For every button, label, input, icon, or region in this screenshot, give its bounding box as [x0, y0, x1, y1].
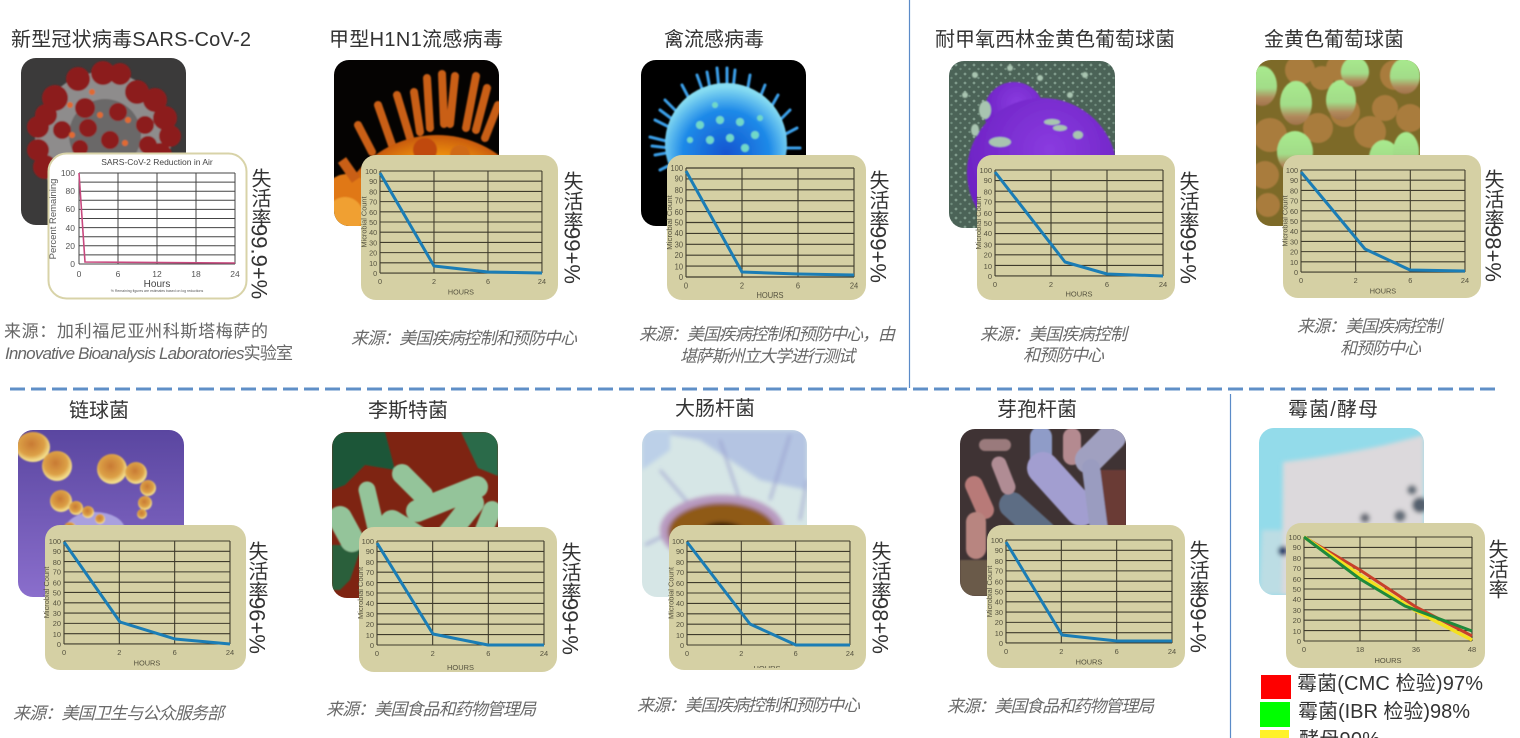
- chart: 100: [670, 164, 683, 173]
- chart: 50: [676, 589, 684, 598]
- chart: Microbial Count: [360, 196, 368, 248]
- chart: 100: [672, 537, 684, 546]
- heading: 大肠杆菌: [675, 397, 755, 420]
- image: E. coli: [642, 430, 807, 597]
- chart: 40: [675, 229, 683, 238]
- chart: 50: [1293, 585, 1301, 594]
- panel: Staphylococcus aureus: [1247, 28, 1506, 358]
- chart: 0: [1294, 268, 1298, 277]
- chart: 10: [675, 262, 683, 272]
- chart: SARS-CoV-2 reduction in air: 60: [66, 204, 75, 214]
- chart: 70: [676, 568, 684, 577]
- rate label: 失活率: [866, 170, 889, 230]
- source: 和预防中心: [1340, 339, 1422, 358]
- heading: 李斯特菌: [368, 399, 448, 422]
- chart: 50: [366, 589, 374, 598]
- chart: 90: [366, 547, 374, 556]
- chart: 20: [995, 618, 1003, 627]
- chart: HOURS: [1076, 658, 1102, 667]
- chart: [1280, 155, 1481, 298]
- rate label: 失活率: [1485, 539, 1508, 599]
- heading: 禽流感病毒: [664, 28, 764, 51]
- chart: 6: [796, 281, 800, 291]
- source: 来源：美国食品和药物管理局: [947, 697, 1155, 716]
- rate label: 失活率: [1186, 540, 1209, 600]
- chart: SARS-CoV-2 reduction in air: 100: [61, 168, 75, 178]
- chart: 90: [1293, 543, 1301, 552]
- chart: 24: [1168, 647, 1176, 656]
- chart: 0: [685, 649, 689, 658]
- chart: 30: [366, 610, 374, 619]
- rate label: [246, 168, 272, 299]
- rate label: 失活率: [560, 171, 583, 231]
- chart: 20: [366, 620, 374, 629]
- source: 来源：美国疾病控制和预防中心: [637, 696, 861, 715]
- rate label: 失活率: [868, 541, 891, 601]
- source: 来源：加利福尼亚州科斯塔梅萨的: [4, 322, 268, 341]
- rate label: [1176, 171, 1200, 284]
- chart: 30: [675, 240, 683, 250]
- chart: [42, 525, 246, 670]
- chart: [665, 155, 866, 300]
- chart: 80: [675, 186, 683, 195]
- rate label: 失活率: [558, 542, 581, 602]
- rate label: 99+%: [558, 598, 582, 655]
- heading: 甲型H1N1流感病毒: [329, 28, 503, 51]
- chart: 0: [999, 639, 1003, 648]
- chart: 90: [369, 177, 377, 186]
- divider: vertical bottom right: [1230, 394, 1232, 738]
- chart: 0: [370, 641, 374, 650]
- chart: 18: [1356, 645, 1364, 654]
- chart: 0: [1004, 647, 1008, 656]
- panel: MRSA: [935, 28, 1200, 365]
- panel: E. coli: [637, 397, 892, 715]
- chart: 70: [995, 567, 1003, 576]
- rate label: 99+%: [1176, 227, 1200, 284]
- chart: 80: [369, 187, 377, 197]
- chart: 20: [369, 248, 377, 257]
- chart: 0: [680, 641, 684, 650]
- chart: 10: [984, 262, 992, 271]
- panel: SARS-CoV-2: [4, 28, 293, 363]
- legend: [1260, 672, 1483, 738]
- chart: SARS-CoV-2 reduction in air: Hours: [144, 279, 170, 290]
- chart: HOURS: [1370, 287, 1396, 296]
- image: avian flu virus: [641, 60, 806, 226]
- chart: 100: [1288, 533, 1301, 542]
- chart: 70: [984, 198, 992, 207]
- chart: Microbial Count: [974, 196, 983, 250]
- rate label: 98+%: [868, 597, 892, 654]
- chart: 0: [378, 277, 382, 286]
- chart: 2: [739, 649, 743, 658]
- chart: 20: [676, 620, 684, 629]
- chart: 10: [1293, 627, 1301, 636]
- source: 来源：美国疾病控制: [1297, 317, 1445, 336]
- chart: 24: [1461, 276, 1469, 285]
- chart: HOURS: [134, 659, 160, 668]
- image: mold: [1259, 428, 1428, 595]
- chart: 60: [1293, 575, 1301, 584]
- chart: 60: [369, 208, 377, 217]
- chart: HOURS: [1065, 289, 1093, 298]
- chart: 24: [538, 277, 546, 286]
- chart: 40: [366, 599, 374, 608]
- divider: vertical top: [908, 0, 910, 388]
- chart: HOURS: [448, 288, 474, 297]
- chart: 10: [53, 630, 61, 639]
- chart: 40: [1293, 595, 1301, 604]
- chart: 70: [1290, 196, 1298, 205]
- panel: Listeria: [326, 399, 582, 719]
- chart: 20: [675, 251, 683, 260]
- heading: 链球菌: [69, 399, 129, 422]
- source: 来源：美国疾病控制: [980, 325, 1130, 344]
- source: [4, 322, 293, 363]
- image: Staphylococcus aureus: [1256, 60, 1420, 226]
- chart: [974, 155, 1175, 300]
- chart: 40: [53, 598, 61, 607]
- chart: 2: [432, 277, 436, 286]
- chart: 0: [373, 269, 377, 278]
- image: influenza virus: [334, 60, 499, 226]
- chart: [360, 155, 558, 300]
- chart: 50: [995, 587, 1003, 596]
- chart: 2: [431, 649, 435, 658]
- rate label: 失活率: [1176, 171, 1199, 231]
- source: [980, 325, 1130, 365]
- chart: SARS-CoV-2 reduction in air: 12: [152, 269, 162, 279]
- chart: 100: [991, 536, 1003, 545]
- chart: 80: [676, 558, 684, 567]
- chart: 80: [1290, 187, 1298, 196]
- chart: 80: [53, 558, 61, 567]
- image: MRSA: [949, 61, 1115, 228]
- chart: 30: [995, 608, 1003, 617]
- chart: 50: [53, 588, 61, 597]
- heading: 金黄色葡萄球菌: [1264, 28, 1404, 51]
- chart: [356, 527, 557, 672]
- panel: Streptococcus: [13, 399, 270, 723]
- chart: 24: [850, 281, 859, 291]
- chart: 30: [369, 238, 377, 248]
- source: [639, 325, 896, 366]
- chart: SARS-CoV-2 reduction in air: 0: [77, 269, 82, 279]
- chart: 30: [1293, 606, 1301, 615]
- chart: SARS-CoV-2 reduction in air: 24: [230, 269, 240, 279]
- chart: 0: [1299, 276, 1303, 285]
- chart: [1286, 523, 1485, 668]
- chart: SARS-CoV-2 reduction in air: SARS-CoV-2 Reduction in Air: [101, 157, 213, 167]
- rate label: [1186, 540, 1210, 653]
- rate label: 99.9+%: [246, 224, 272, 299]
- rate label: 98+%: [1480, 225, 1506, 282]
- chart: [985, 525, 1185, 668]
- rate label: 99+%: [866, 226, 890, 283]
- source: 来源：美国疾病控制和预防中心: [351, 329, 578, 348]
- rate label: [560, 171, 584, 284]
- rate label: 99+%: [1186, 596, 1210, 653]
- chart: 24: [540, 649, 548, 658]
- source: 堪萨斯州立大学进行测试: [680, 347, 857, 366]
- chart: 80: [984, 187, 992, 196]
- chart: Microbial Count: [665, 194, 674, 250]
- source: Innovative Bioanalysis Laboratories实验室: [5, 344, 293, 363]
- chart: 60: [675, 208, 683, 217]
- chart: 6: [794, 649, 798, 658]
- chart: 70: [675, 196, 683, 206]
- chart: HOURS: [753, 664, 781, 673]
- image: Listeria: [332, 432, 498, 598]
- chart: 2: [740, 281, 744, 291]
- chart: 0: [375, 649, 379, 658]
- chart: 36: [1412, 645, 1420, 654]
- chart: 60: [984, 209, 992, 218]
- source: 来源：美国疾病控制和预防中心，由: [639, 325, 896, 344]
- panel: Bacillus: [947, 398, 1210, 716]
- chart: 70: [53, 568, 61, 577]
- chart: 0: [993, 280, 997, 289]
- chart: 100: [1286, 166, 1298, 175]
- source: 来源：美国食品和药物管理局: [326, 700, 537, 719]
- chart: 0: [679, 273, 683, 282]
- chart: 40: [369, 228, 377, 237]
- chart: SARS-CoV-2 reduction in air: % Remaining figures are estimates based on log reductions: [111, 289, 203, 293]
- panel: avian influenza: [639, 28, 896, 366]
- chart: 20: [1293, 616, 1301, 625]
- chart: HOURS: [756, 291, 784, 300]
- chart: 0: [62, 648, 66, 657]
- chart: 6: [1115, 647, 1119, 656]
- chart: 0: [988, 272, 992, 281]
- chart: 60: [995, 578, 1003, 587]
- image: Bacillus: [960, 429, 1126, 596]
- chart: 90: [675, 174, 683, 184]
- chart: 30: [676, 610, 684, 619]
- chart: 50: [675, 218, 683, 228]
- heading: 耐甲氧西林金黄色葡萄球菌: [935, 28, 1175, 51]
- chart: 100: [49, 537, 61, 546]
- chart: [667, 525, 866, 673]
- chart: 6: [173, 648, 177, 657]
- chart: 24: [846, 649, 854, 658]
- chart: 10: [369, 259, 377, 268]
- source: 和预防中心: [1023, 346, 1105, 365]
- chart: 90: [676, 547, 684, 556]
- chart: 100: [365, 167, 377, 176]
- chart: 70: [369, 197, 377, 206]
- chart: 40: [995, 597, 1003, 606]
- chart: 20: [984, 251, 992, 260]
- chart: 70: [366, 568, 374, 577]
- chart: SARS-CoV-2 reduction in air: 20: [66, 241, 75, 251]
- legend: 霉菌(CMC 检验)97%: [1297, 672, 1483, 695]
- chart: 90: [53, 547, 61, 556]
- image: Streptococcus: [16, 430, 184, 597]
- chart: 40: [676, 599, 684, 608]
- chart: HOURS: [1374, 656, 1402, 665]
- chart: 2: [1049, 280, 1053, 289]
- chart: 6: [486, 277, 490, 286]
- chart: 60: [53, 579, 61, 588]
- rate label: [244, 541, 270, 654]
- chart: 50: [984, 219, 992, 228]
- chart: 50: [369, 218, 377, 227]
- chart: 80: [1293, 554, 1301, 563]
- chart: 60: [1290, 207, 1298, 216]
- chart: 48: [1468, 645, 1476, 654]
- divider: horizontal dashed: [10, 388, 1501, 390]
- chart: SARS-CoV-2 reduction in air: 40: [66, 223, 75, 233]
- chart: 6: [486, 649, 490, 658]
- heading: 芽孢杆菌: [997, 398, 1077, 421]
- chart: 2: [1354, 276, 1358, 285]
- chart: 10: [676, 631, 684, 640]
- chart: 10: [995, 629, 1003, 638]
- chart: 24: [226, 648, 234, 657]
- chart: 40: [1290, 227, 1298, 236]
- chart: 90: [1290, 176, 1298, 185]
- chart: 0: [1302, 645, 1306, 654]
- heading: 霉菌/酵母: [1288, 398, 1378, 421]
- rate label: [558, 542, 582, 655]
- legend: 霉菌(IBR 检验)98%: [1298, 700, 1470, 723]
- rate label: 失活率: [248, 168, 271, 228]
- chart: Microbial Count: [985, 566, 994, 617]
- chart: 24: [1159, 280, 1167, 289]
- chart: HOURS: [447, 663, 474, 672]
- chart: SARS-CoV-2 reduction in air: 80: [66, 186, 75, 196]
- rate label: [1480, 169, 1506, 282]
- chart: 100: [362, 537, 374, 546]
- chart: Microbial Count: [356, 566, 365, 619]
- source: 来源：美国卫生与公众服务部: [13, 704, 227, 723]
- chart: 2: [117, 648, 121, 657]
- rate label: 96+%: [244, 597, 270, 654]
- chart: Microbial Count: [1280, 195, 1289, 247]
- chart: SARS-CoV-2 reduction in air: 6: [116, 269, 121, 279]
- chart: 20: [1290, 247, 1298, 256]
- chart: 2: [1059, 647, 1063, 656]
- panel: H1N1: [323, 28, 584, 348]
- rate label: [868, 541, 892, 654]
- chart: 60: [676, 579, 684, 588]
- rate label: 失活率: [245, 541, 268, 601]
- rate label: 99+%: [560, 227, 584, 284]
- chart: 0: [684, 281, 688, 291]
- chart: 50: [1290, 217, 1298, 226]
- chart: 90: [984, 176, 992, 185]
- chart: Microbial Count: [667, 567, 675, 619]
- chart: 70: [1293, 564, 1301, 573]
- chart: 10: [1290, 258, 1298, 267]
- chart: SARS-CoV-2 reduction in air: 0: [70, 259, 75, 269]
- chart: 80: [366, 558, 374, 567]
- chart: 60: [366, 579, 374, 588]
- chart: 20: [53, 619, 61, 628]
- chart: 80: [995, 557, 1003, 566]
- chart: 0: [1297, 637, 1301, 646]
- chart: 40: [984, 229, 992, 238]
- chart: 30: [53, 609, 61, 618]
- rate label: [866, 170, 890, 283]
- chart: 10: [366, 631, 374, 640]
- panel: mold and yeast: [1259, 398, 1508, 738]
- rate label: 失活率: [1481, 169, 1504, 229]
- chart: 6: [1408, 276, 1412, 285]
- chart: 90: [995, 546, 1003, 555]
- heading: 新型冠状病毒SARS-CoV-2: [11, 28, 251, 51]
- chart: SARS-CoV-2 reduction in air: 18: [191, 269, 201, 279]
- chart: 100: [979, 166, 992, 175]
- source: [1297, 317, 1445, 358]
- chart: SARS-CoV-2 reduction in air: [48, 154, 246, 298]
- image: coronavirus: [21, 58, 186, 225]
- chart: 30: [984, 240, 992, 249]
- chart: SARS-CoV-2 reduction in air: Percent Remaining: [48, 179, 59, 259]
- chart: 30: [1290, 238, 1298, 247]
- chart: 0: [57, 640, 61, 649]
- chart: 6: [1105, 280, 1109, 289]
- chart: Microbial Count: [42, 567, 51, 618]
